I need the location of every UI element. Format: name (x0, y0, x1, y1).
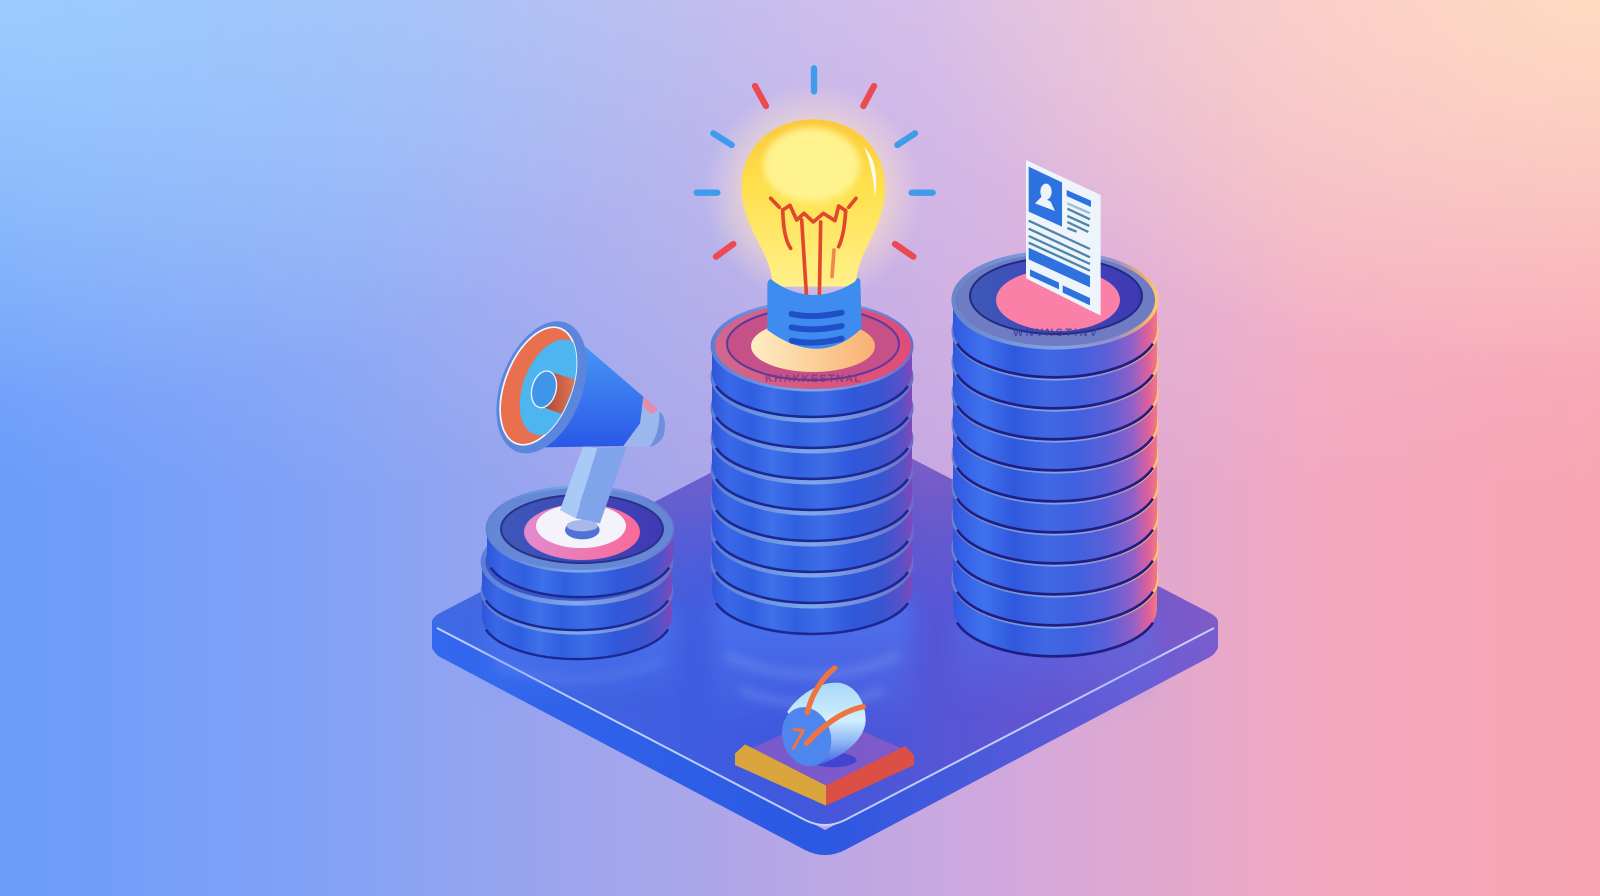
stack reflection columns (488, 600, 1156, 730)
left coin stack (482, 488, 673, 659)
white disc (536, 504, 626, 548)
pink disc (996, 269, 1120, 331)
box top face (737, 715, 913, 787)
neck pink accent (643, 397, 658, 414)
handle (560, 445, 627, 539)
platform edge highlight (437, 628, 1214, 825)
glass (742, 119, 885, 287)
coin edge lettering: WNVNSTINV (1013, 327, 1098, 339)
right coin stack (953, 253, 1157, 656)
platform side thickness (432, 622, 1218, 855)
platform reflections (488, 600, 1156, 730)
glow (703, 83, 923, 303)
reflected coin ridges (495, 655, 900, 704)
coin stack body (953, 253, 1157, 656)
isometric platform (432, 419, 1218, 855)
top face (487, 488, 673, 570)
top face (957, 254, 1155, 346)
right button (1063, 285, 1090, 305)
page (1026, 160, 1101, 316)
speaker opening (528, 368, 560, 410)
glass highlight (763, 128, 860, 202)
drum shadow (810, 753, 857, 767)
icon: resume document (1026, 160, 1101, 316)
top face recess (501, 495, 663, 563)
heading bar (1067, 190, 1091, 207)
person icon (1035, 184, 1055, 211)
top face (715, 303, 911, 389)
top face recess (970, 258, 1142, 334)
rim (479, 308, 604, 466)
box yellow side (735, 744, 826, 806)
coin stack body (712, 303, 912, 634)
check marks (793, 668, 863, 748)
pink disc (524, 504, 640, 560)
platform apex tint (432, 419, 1218, 825)
end cap (649, 412, 665, 447)
screw threads (792, 313, 842, 343)
photo block (1029, 167, 1062, 227)
screw base (767, 278, 862, 349)
blue interior (520, 340, 576, 436)
filament (771, 198, 856, 298)
coin edge lettering: KHAKKESTNAL (765, 373, 861, 385)
orange interior (485, 316, 592, 456)
coin stack body (482, 488, 673, 659)
cream disc (751, 320, 875, 372)
icon: target box with drum (735, 668, 914, 806)
wide bar (1029, 248, 1090, 287)
text lines (1029, 203, 1090, 271)
neck (623, 395, 666, 447)
middle coin stack (712, 303, 912, 634)
box red side (826, 746, 914, 806)
rays (697, 68, 933, 257)
drum body (787, 683, 866, 766)
icon: light bulb (697, 68, 933, 349)
platform top surface (432, 419, 1218, 825)
drum face (775, 701, 839, 773)
specular streak (864, 147, 876, 197)
icon: megaphone (496, 321, 666, 540)
left button (1030, 269, 1059, 289)
top face recess (727, 308, 899, 380)
cone (540, 335, 643, 447)
